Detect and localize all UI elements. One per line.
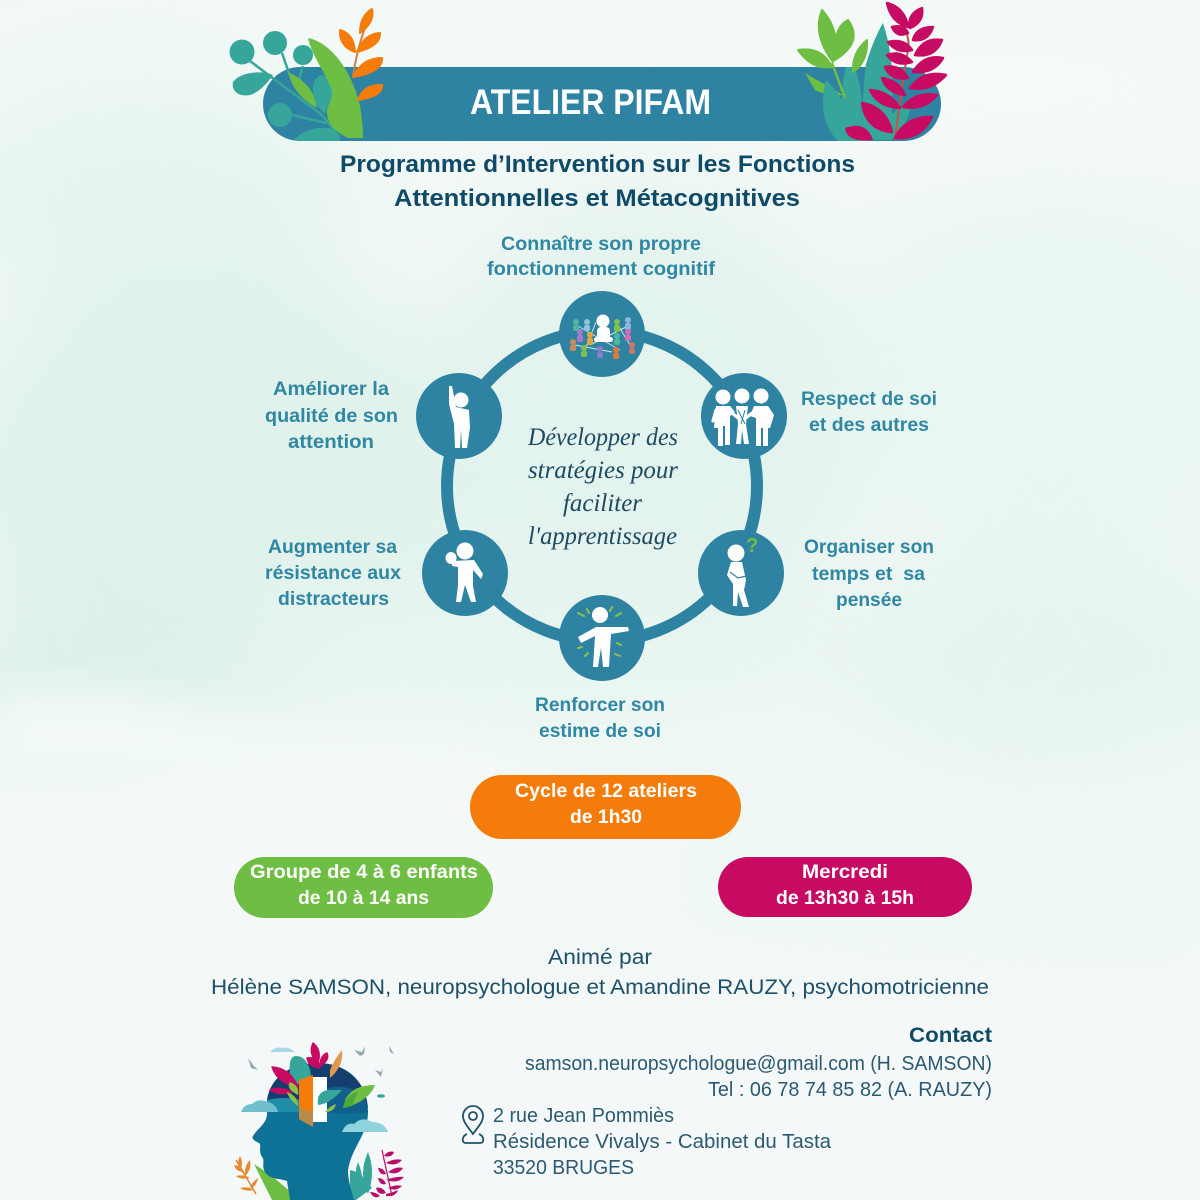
- label: respect: Respect de soi: [801, 389, 937, 410]
- central text: stratégies pour: [528, 457, 678, 484]
- label: ameliorer: attention: [288, 432, 374, 453]
- label: renforcer: estime de soi: [539, 721, 661, 742]
- pill: cycle: de 1h30: [570, 807, 642, 828]
- label: connaitre: [487, 234, 716, 280]
- title: ATELIER PIFAM: [470, 83, 711, 122]
- label: augmenter: résistance aux: [265, 563, 401, 584]
- pill: cycle: [470, 775, 741, 839]
- subtitle: [340, 151, 855, 212]
- address: 2 rue Jean Pommiès: [493, 1105, 674, 1127]
- pill: groupe: [234, 857, 493, 918]
- address: 33520 BRUGES: [493, 1157, 634, 1179]
- address: [493, 1105, 832, 1179]
- node: confident figure icon: [559, 595, 645, 681]
- label: organiser: pensée: [836, 590, 902, 611]
- label: organiser: Organiser son: [804, 537, 934, 558]
- pill: groupe: Groupe de 4 à 6 enfants: [250, 862, 478, 883]
- animators text: Hélène SAMSON, neuropsychologue et Amandine RAUZY, psychomotricienne: [211, 976, 989, 999]
- animators text: [211, 946, 989, 999]
- pill: mercredi: Mercredi: [802, 862, 888, 883]
- label: renforcer: Renforcer son: [535, 695, 665, 716]
- label: ameliorer: qualité de son: [265, 406, 398, 427]
- pill: groupe: de 10 à 14 ans: [298, 888, 429, 909]
- central text: l'apprentissage: [528, 523, 677, 550]
- contact block: Contact: [909, 1024, 992, 1047]
- label: organiser: [804, 537, 934, 611]
- ring: [447, 331, 757, 641]
- label: respect: [801, 389, 937, 436]
- label: connaitre: Connaître son propre: [501, 234, 701, 255]
- illustration: head with foliage: [234, 1043, 404, 1200]
- right foliage: [798, 3, 946, 141]
- node: thinking figure icon: [698, 530, 784, 616]
- node: respect trio icon: [701, 373, 787, 459]
- label: ameliorer: [265, 379, 398, 453]
- node: group network icon: [559, 291, 645, 377]
- node: thinking figure icon: ?: [746, 535, 758, 557]
- label: augmenter: [265, 537, 401, 610]
- central text: [527, 424, 678, 550]
- animators text: Animé par: [548, 946, 652, 969]
- label: ameliorer: Améliorer la: [273, 379, 389, 400]
- pill: mercredi: [718, 857, 972, 917]
- contact block: samson.neuropsychologue@gmail.com (H. SAMSON): [525, 1053, 992, 1075]
- node: raised hand figure icon: [416, 373, 502, 459]
- address: Résidence Vivalys - Cabinet du Tasta: [493, 1131, 832, 1153]
- pill: cycle: Cycle de 12 ateliers: [515, 781, 697, 802]
- banner: title bar: [263, 67, 941, 141]
- subtitle: Attentionnelles et Métacognitives: [394, 185, 800, 212]
- label: augmenter: distracteurs: [278, 589, 389, 610]
- label: organiser: temps et sa: [812, 564, 925, 585]
- contact block: Tel : 06 78 74 85 82 (A. RAUZY): [708, 1079, 992, 1101]
- label: respect: et des autres: [809, 415, 929, 436]
- subtitle: Programme d’Intervention sur les Fonctions: [340, 151, 855, 178]
- contact block: [525, 1024, 992, 1101]
- label: augmenter: Augmenter sa: [268, 537, 397, 558]
- central text: faciliter: [563, 490, 642, 517]
- node: resistance figure icon: [422, 530, 508, 616]
- central text: Développer des: [527, 424, 678, 451]
- pill: mercredi: de 13h30 à 15h: [776, 888, 914, 909]
- label: connaitre: fonctionnement cognitif: [487, 259, 716, 280]
- left foliage: [230, 9, 382, 141]
- label: renforcer: [535, 695, 665, 742]
- icon: location pin: [463, 1106, 483, 1143]
